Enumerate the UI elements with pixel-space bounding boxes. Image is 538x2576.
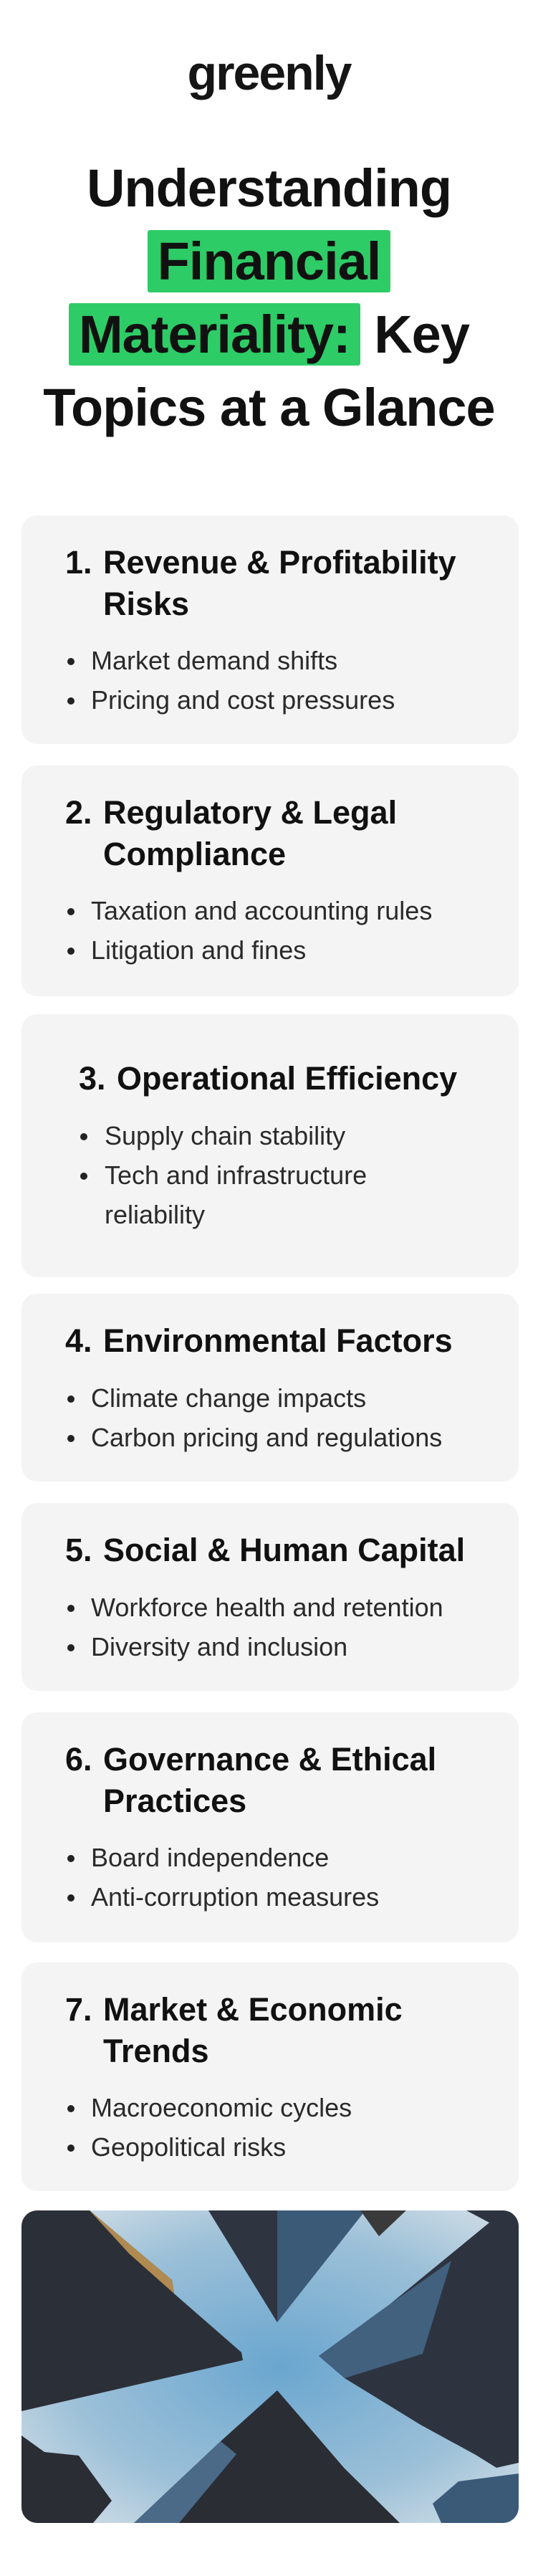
bullet list: Diversity and inclusion: [91, 1631, 347, 1661]
title: Materiality: Key: [79, 305, 469, 364]
bullet list: Carbon pricing and regulations: [91, 1422, 442, 1452]
heading: Revenue & Profitability: [103, 544, 456, 581]
bullet list: Market demand shifts: [91, 646, 337, 675]
panel: revenue & profitability: [21, 515, 519, 744]
heading: Regulatory & Legal: [103, 794, 397, 831]
bullet list: Tech and infrastructure: [105, 1160, 367, 1190]
bullet list: [67, 1843, 379, 1912]
heading: [65, 1741, 436, 1819]
panel: environmental: [21, 1294, 519, 1482]
bullet list: Supply chain stability: [105, 1121, 345, 1150]
bullet list: Macroeconomic cycles: [91, 2093, 352, 2122]
bullet list: Workforce health and retention: [91, 1593, 443, 1621]
bullet list: [67, 646, 395, 715]
heading: Social & Human Capital: [103, 1532, 465, 1568]
heading: Compliance: [103, 836, 286, 872]
bullet list: [67, 2093, 352, 2162]
heading: 2.: [65, 794, 92, 831]
heading: Operational Efficiency: [117, 1060, 457, 1097]
heading: 3.: [79, 1060, 106, 1097]
bullet list: [80, 1121, 367, 1229]
heading: Risks: [103, 585, 189, 622]
heading: 7.: [65, 1991, 92, 2028]
heading: Governance & Ethical: [103, 1741, 436, 1778]
bullet list: Board independence: [91, 1843, 329, 1872]
heading: 5.: [65, 1532, 92, 1568]
heading: Environmental Factors: [103, 1322, 453, 1359]
panel: market: [21, 1962, 519, 2191]
heading: 4.: [65, 1322, 92, 1359]
heading: [65, 1991, 403, 2069]
bullet list: Climate change impacts: [91, 1383, 366, 1412]
bullet list: [67, 1383, 442, 1452]
bullet list: reliability: [105, 1200, 205, 1229]
panel: social: [21, 1503, 519, 1691]
photo: skyscrapers: [21, 2210, 519, 2523]
bullet list: Anti-corruption measures: [91, 1882, 379, 1912]
bullet list: Pricing and cost pressures: [91, 685, 395, 715]
title: Topics at a Glance: [43, 378, 495, 437]
bullet list: [67, 896, 432, 965]
title: [43, 158, 495, 437]
heading: 1.: [65, 544, 92, 581]
panel: operational: [21, 1014, 519, 1277]
heading: 6.: [65, 1741, 92, 1778]
bullet list: Taxation and accounting rules: [91, 896, 432, 925]
panel: governance: [21, 1712, 519, 1942]
logo: greenly: [188, 46, 350, 100]
bullet list: [67, 1593, 443, 1661]
title: Understanding: [87, 158, 451, 218]
heading: Trends: [103, 2033, 209, 2069]
heading: Practices: [103, 1782, 246, 1819]
heading: Market & Economic: [103, 1991, 403, 2028]
title: Financial: [158, 232, 380, 291]
panel: regulatory: [21, 765, 519, 996]
bullet list: Litigation and fines: [91, 935, 306, 965]
heading: [65, 544, 456, 622]
heading: [65, 794, 397, 872]
bullet list: Geopolitical risks: [91, 2132, 286, 2162]
